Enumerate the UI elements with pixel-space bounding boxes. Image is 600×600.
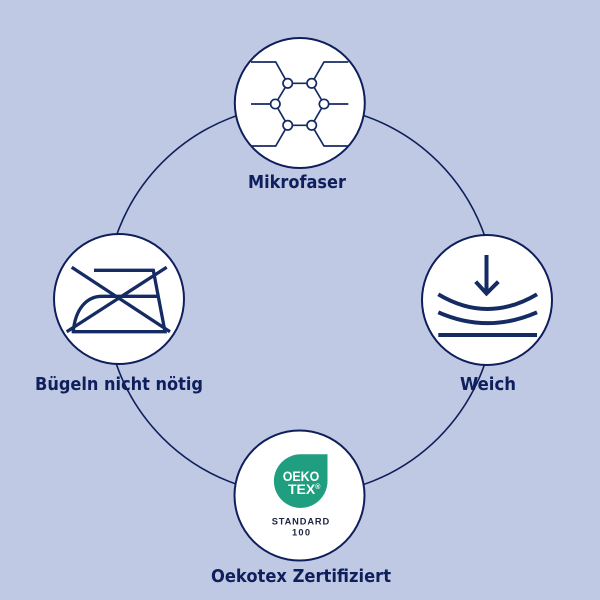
icon: Oekotex logo: STANDARD (272, 516, 329, 526)
icon: Oekotex logo: TEX (288, 481, 315, 497)
label: Bügeln nicht nötig: Bügeln nicht nötig (35, 374, 203, 395)
label: Weich: Weich (460, 374, 516, 395)
panel: Weich (422, 235, 552, 395)
icon: Oekotex logo: ® (315, 483, 321, 491)
icon: Oekotex logo: OEKO (283, 468, 319, 484)
label: Mikrofaser: Mikrofaser (248, 172, 346, 193)
icon: molecule hexagon (251, 62, 348, 146)
icon circle: Oekotex (234, 430, 364, 560)
panel: Oekotex Zertifiziert (211, 430, 391, 587)
icon: Oekotex logo (272, 454, 329, 538)
icon: crossed-out iron (67, 267, 170, 332)
icon: arrow pressing soft layers (438, 255, 537, 335)
icon circle: Mikrofaser (235, 38, 365, 168)
panel: Bügeln nicht nötig (35, 234, 203, 395)
icon circle: soft (422, 235, 552, 365)
label: Oekotex Zertifiziert: Oekotex Zertifiziert (211, 566, 391, 587)
connecting ring (106, 105, 496, 495)
icon circle: no ironing (54, 234, 184, 364)
panel: Mikrofaser (235, 38, 365, 193)
icon: Oekotex logo: 100 (292, 528, 310, 538)
